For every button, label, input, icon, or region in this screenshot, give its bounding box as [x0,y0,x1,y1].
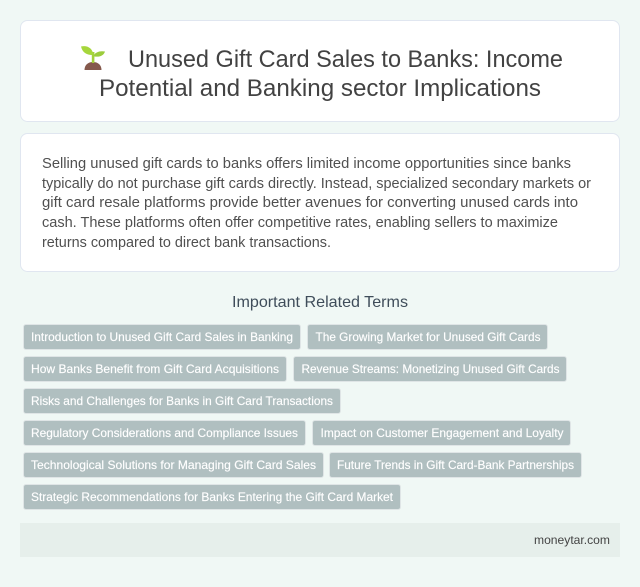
tag [24,420,306,446]
tag [308,324,548,350]
description line 2: typically do not purchase gift cards directly. Instead, specialized secondary markets or [42,176,591,192]
footer source text: moneytar.com [534,533,610,547]
tag: Risks and Challenges for Banks in Gift Card Transactions [31,394,333,408]
tag [24,452,324,478]
tag [24,356,286,382]
description line 4: cash. These platforms often offer competitive rates, enabling sellers to maximize [42,215,558,231]
title line 2: Potential and Banking sector Implications [99,75,541,102]
tag [330,452,582,478]
description line 1: Selling unused gift cards to banks offers limited income opportunities since banks [42,156,571,172]
tag: Future Trends in Gift Card-Bank Partnerships [337,458,574,472]
tag: Introduction to Unused Gift Card Sales in Banking [31,330,293,344]
tag: Strategic Recommendations for Banks Entering the Gift Card Market [31,490,394,504]
description line 3: gift card resale platforms provide better avenues for converting unused cards into [42,195,578,211]
heading: related terms: Important Related Terms [232,294,408,311]
tag [294,356,566,382]
tag [24,484,400,510]
panel: title [20,20,620,122]
tag: Technological Solutions for Managing Gift Card Sales [31,458,316,472]
title line 1: Unused Gift Card Sales to Banks: Income [128,46,563,73]
tag: Revenue Streams: Monetizing Unused Gift Cards [302,362,560,376]
tag: How Banks Benefit from Gift Card Acquisitions [31,362,279,376]
icon: seedling [81,46,105,70]
tag: Regulatory Considerations and Compliance Issues [31,426,298,440]
tag [312,420,570,446]
footer [20,523,620,557]
description line 5: returns compared to direct bank transactions. [42,235,331,251]
tag list [24,324,582,510]
panel: description [20,134,620,272]
tag: The Growing Market for Unused Gift Cards [316,330,540,344]
tag [24,324,300,350]
tag [24,388,340,414]
tag: Impact on Customer Engagement and Loyalty [320,426,564,440]
